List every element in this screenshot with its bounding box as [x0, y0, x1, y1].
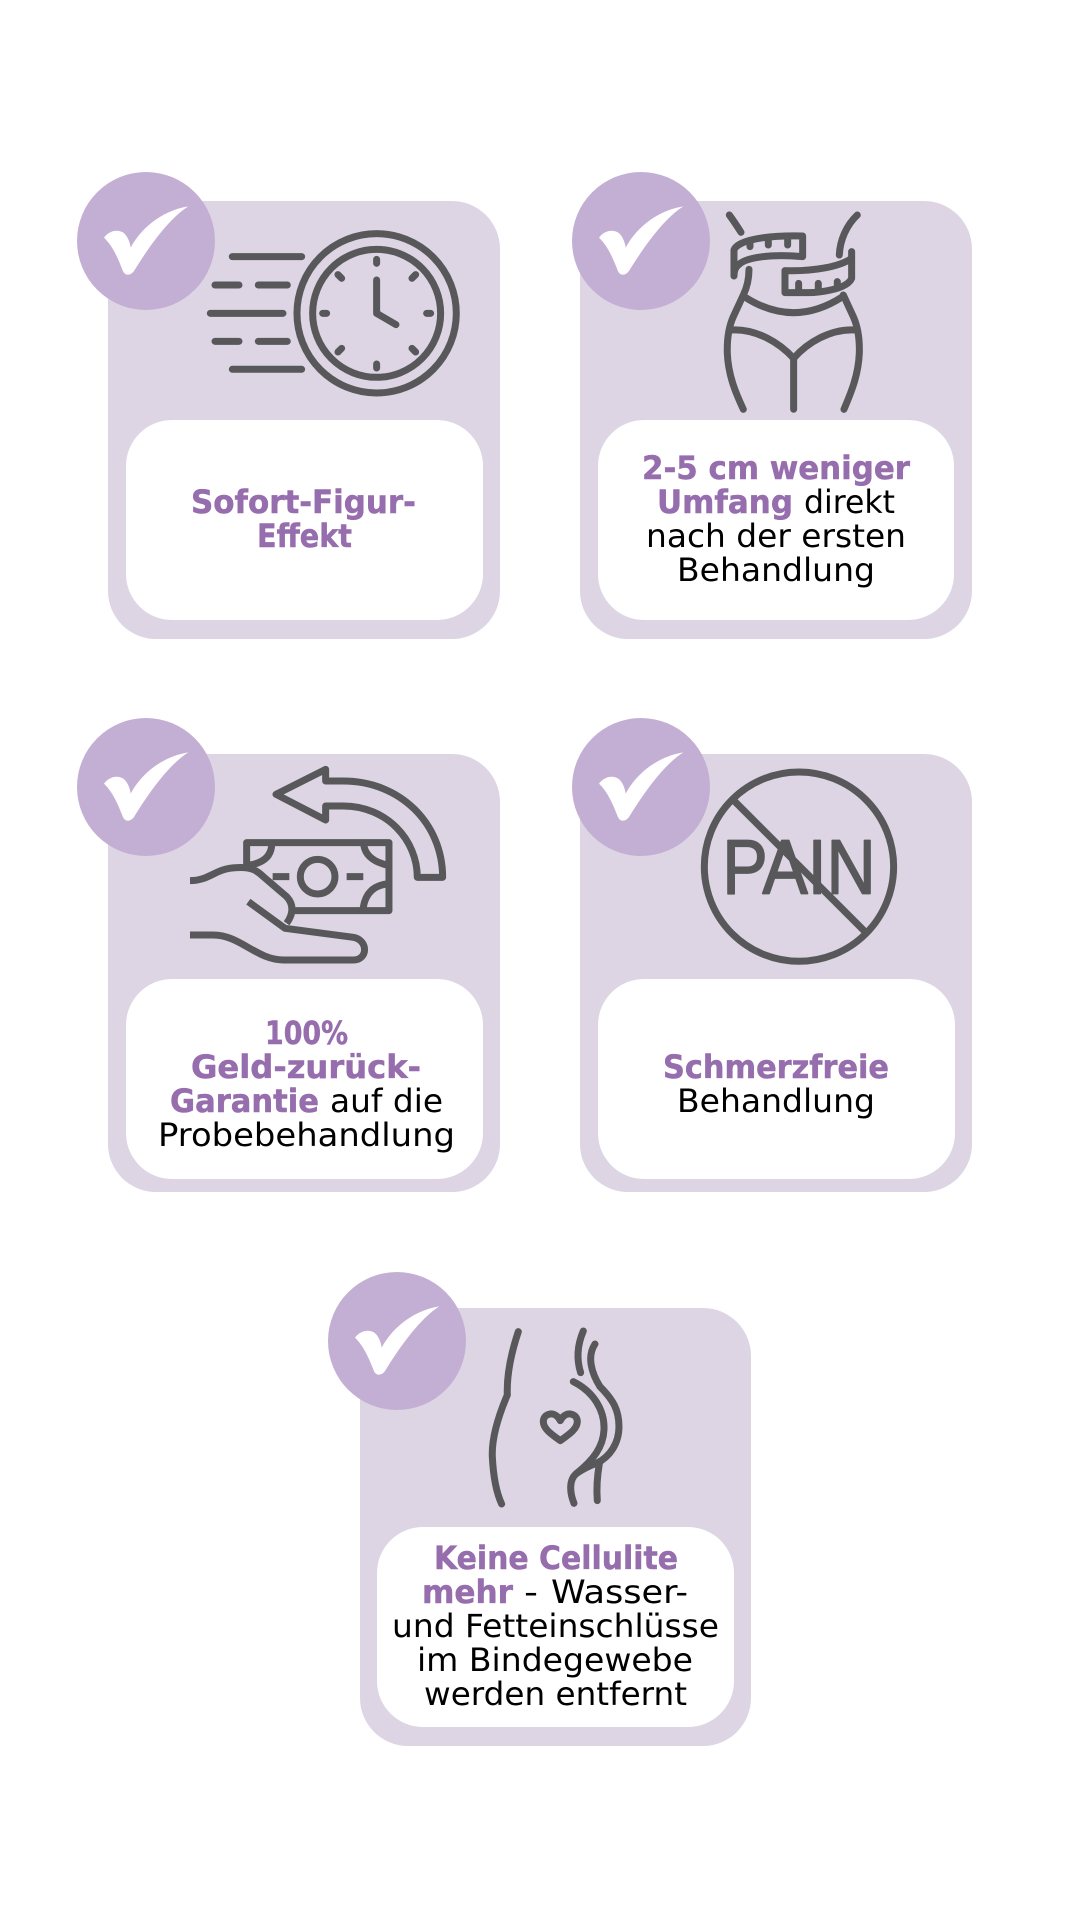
label text: werden entfernt [424, 1675, 687, 1713]
icon: money back hand [190, 769, 443, 960]
check badge [572, 172, 710, 310]
label text: auf die [330, 1082, 443, 1120]
check badge [572, 718, 710, 856]
label text: - [524, 1573, 538, 1611]
label text [392, 1539, 719, 1713]
card background [108, 754, 500, 1192]
check badge [77, 718, 215, 856]
label text [663, 1048, 889, 1120]
label text: Geld-zurück- [191, 1048, 421, 1086]
icon: speeding clock [210, 234, 456, 393]
label text: 100% [265, 1014, 348, 1052]
label text [191, 483, 416, 555]
text box [126, 420, 483, 620]
text box [598, 979, 955, 1179]
icon: body silhouette with heart [492, 1331, 619, 1504]
label text: nach der ersten [646, 517, 906, 555]
panel: Schmerzfreie Behandlung [572, 718, 972, 1192]
label text: und Fetteinschlüsse [392, 1607, 719, 1645]
card background [580, 754, 972, 1192]
card background [360, 1308, 751, 1746]
label text: im Bindegewebe [417, 1641, 693, 1679]
check badge [328, 1272, 466, 1410]
text box [377, 1527, 734, 1727]
label text: Behandlung [677, 1082, 875, 1120]
icon: waist with measuring tape [727, 215, 859, 409]
label text: Sofort-Figur- [191, 483, 416, 521]
label text: Umfang [657, 483, 793, 521]
icon: no pain sign: PAIN [722, 825, 876, 910]
label text: Wasser- [551, 1573, 688, 1611]
label text [158, 1014, 455, 1154]
label text: mehr [422, 1573, 513, 1611]
check badge [77, 172, 215, 310]
label text: 2-5 cm weniger [642, 449, 910, 487]
label text [642, 449, 910, 589]
panel: Sofort-Figur-Effekt [77, 172, 500, 639]
panel: Keine Cellulite mehr [328, 1272, 751, 1746]
label text: Effekt [257, 517, 352, 555]
card background [580, 201, 972, 639]
panel: 2-5 cm weniger Umfang [572, 172, 972, 639]
label text: direkt [804, 483, 895, 521]
label text: Probebehandlung [158, 1116, 455, 1154]
icon: no pain sign [704, 772, 894, 961]
label text: Keine Cellulite [434, 1539, 678, 1577]
label text: Behandlung [677, 551, 875, 589]
label text: Schmerzfreie [663, 1048, 889, 1086]
text box [126, 979, 483, 1179]
panel: 100% Geld-zurück-Garantie [77, 718, 500, 1192]
text box [598, 420, 954, 620]
card background [108, 201, 500, 639]
label text: Garantie [170, 1082, 319, 1120]
